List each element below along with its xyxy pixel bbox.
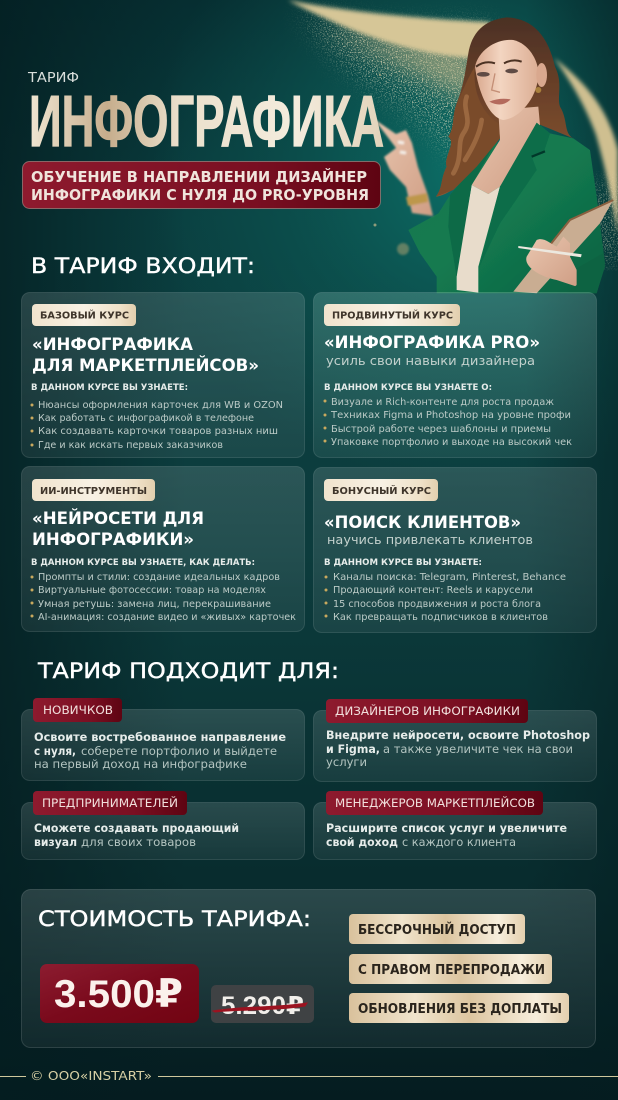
panel: basic course: Как работать с инфографикой в телефоне	[38, 413, 254, 424]
hair highlights	[453, 97, 482, 173]
left lapel	[448, 140, 497, 277]
chest	[472, 107, 540, 194]
panel: basic course: Как создавать карточки товаров разных ниш	[38, 426, 278, 437]
panel: designers: услуги	[326, 755, 367, 769]
panel: beginners: с нуля,	[34, 744, 76, 758]
panel: advanced course: усиль свои навыки дизайнера	[326, 353, 535, 368]
subtitle banner: ОБУЧЕНИЕ В НАПРАВЛЕНИИ ДИЗАЙНЕР	[31, 167, 367, 186]
panel: bonus course: научись привлекать клиентов	[327, 532, 533, 547]
panel: beginners: на первый доход на инфографике	[34, 757, 247, 771]
panel: basic course: БАЗОВЫЙ КУРС	[40, 308, 129, 322]
tariff label: ТАРИФ	[27, 70, 79, 86]
panel: AI tools: В ДАННОМ КУРСЕ ВЫ УЗНАЕТЕ, КАК ДЕЛАТЬ:	[31, 558, 255, 568]
panel: entrepreneurs: ПРЕДПРИНИМАТЕЛЕЙ	[42, 795, 178, 810]
heading: included: В ТАРИФ ВХОДИТ:	[31, 254, 255, 278]
current price: 3.500₽	[54, 973, 183, 1016]
tablet	[513, 200, 613, 293]
panel: advanced course: «ИНФОГРАФИКА PRO»	[324, 333, 540, 353]
hand	[526, 237, 578, 287]
blouse	[457, 185, 500, 293]
panel: marketplace managers: свой доход	[326, 835, 398, 849]
panel: marketplace managers: с каждого клиента	[402, 835, 516, 849]
panel: basic course: «ИНФОГРАФИКА	[32, 335, 194, 355]
panel: entrepreneurs: Сможете создавать продающий	[34, 821, 239, 835]
panel: bonus course: 15 способов продвижения и роста блога	[333, 599, 541, 610]
panel: advanced course: Быстрой работе через шаблоны и приемы	[331, 424, 551, 435]
feature: lifetime access: БЕССРОЧНЫЙ ДОСТУП	[358, 922, 516, 938]
panel: AI tools	[22, 466, 304, 632]
tablet edge	[550, 200, 613, 245]
woman portrait illustration	[408, 17, 613, 293]
panel: AI tools: ИНФОГРАФИКИ»	[32, 530, 194, 550]
panel: advanced course: Упаковке портфолио и выходе на высокий чек	[331, 437, 572, 448]
bracelet	[406, 193, 428, 206]
right lapel	[479, 123, 550, 267]
back hair	[436, 17, 573, 197]
panel: bonus course: Продающий контент: Reels и карусели	[333, 585, 533, 596]
panel: advanced course: ПРОДВИНУТЫЙ КУРС	[332, 308, 453, 322]
lapel notch	[532, 151, 545, 157]
ear	[536, 63, 547, 87]
footer: © ООО«INSTART»	[30, 1068, 152, 1083]
panel: bonus course: БОНУСНЫЙ КУРС	[332, 484, 431, 497]
panel: AI tools: AI-анимация: создание видео и «живых» карточек	[38, 612, 296, 623]
jacket	[408, 123, 605, 293]
main title: ИНФОГРАФИКА	[29, 82, 384, 162]
panel: designers: и Figma,	[326, 742, 380, 756]
panel: beginners: Освоите востребованное направление	[34, 730, 286, 744]
old price: 5.290₽	[221, 992, 304, 1020]
panel: marketplace managers: МЕНЕДЖЕРОВ МАРКЕТПЛЕЙСОВ	[335, 795, 535, 810]
panel: AI tools: Промпты и стили: создание идеальных кадров	[38, 572, 280, 583]
panel: advanced course	[314, 292, 596, 458]
raised left hand	[374, 119, 433, 216]
panel: designers: Внедрите нейросети, освоите Photoshop	[326, 728, 590, 742]
panel: beginners: соберете портфолио и выйдете	[81, 744, 277, 758]
panel: AI tools: Умная ретушь: замена лиц, перекрашивание	[38, 599, 271, 610]
panel: price	[22, 890, 596, 1048]
panel: marketplace managers: Расширите список услуг и увеличите	[326, 821, 567, 835]
old price	[211, 985, 314, 1023]
earring	[535, 87, 541, 93]
feature: resale right	[349, 954, 552, 984]
eyes and brows	[476, 60, 522, 92]
panel: marketplace managers	[314, 791, 596, 860]
panel: bonus course: «ПОИСК КЛИЕНТОВ»	[324, 513, 521, 533]
panel: entrepreneurs: визуал	[34, 835, 77, 849]
panel: entrepreneurs: для своих товаров	[81, 835, 196, 849]
front hair lock	[436, 67, 500, 197]
feature: free updates	[349, 993, 569, 1023]
face	[475, 40, 538, 120]
sleeve cuff	[567, 253, 605, 293]
feature: resale right: С ПРАВОМ ПЕРЕПРОДАЖИ	[358, 963, 545, 978]
panel: AI tools: «НЕЙРОСЕТИ ДЛЯ	[32, 507, 204, 529]
current price	[40, 964, 199, 1023]
feature: free updates: ОБНОВЛЕНИЯ БЕЗ ДОПЛАТЫ	[358, 1002, 562, 1017]
price heading: СТОИМОСТЬ ТАРИФА:	[38, 907, 311, 931]
subtitle banner	[22, 162, 380, 208]
panel: basic course: ДЛЯ МАРКЕТПЛЕЙСОВ»	[32, 354, 259, 376]
panel: basic course: В ДАННОМ КУРСЕ ВЫ УЗНАЕТЕ:	[31, 383, 188, 393]
lips	[489, 99, 511, 104]
panel: advanced course: Визуале и Rich-контенте для роста продаж	[331, 397, 554, 408]
panel: AI tools: ИИ-ИНСТРУМЕНТЫ	[40, 486, 147, 497]
panel: beginners: НОВИЧКОВ	[43, 703, 113, 717]
panel: basic course	[22, 292, 304, 458]
panel: bonus course: Каналы поиска: Telegram, Pinterest, Behance	[333, 572, 566, 583]
subtitle banner: ИНФОГРАФИКИ С НУЛЯ ДО PRO-УРОВНЯ	[31, 186, 369, 204]
panel: advanced course: Техниках Figma и Photoshop на уровне профи	[330, 410, 571, 421]
panel: designers	[314, 699, 596, 782]
nails	[398, 142, 406, 153]
panel: basic course: Где и как искать первых заказчиков	[38, 440, 223, 451]
panel: basic course: Нюансы оформления карточек для WB и OZON	[38, 400, 283, 411]
panel: bonus course: Как превращать подписчиков в клиентов	[333, 612, 548, 623]
panel: beginners	[22, 698, 304, 780]
heading: suitable for: ТАРИФ ПОДХОДИТ ДЛЯ:	[37, 659, 339, 683]
panel: bonus course: В ДАННОМ КУРСЕ ВЫ УЗНАЕТЕ:	[324, 558, 482, 568]
panel: entrepreneurs	[22, 791, 304, 860]
pen	[518, 246, 582, 257]
panel: advanced course: В ДАННОМ КУРСЕ ВЫ УЗНАЕТЕ О:	[324, 383, 492, 393]
feature: lifetime access	[349, 914, 525, 944]
panel: designers: ДИЗАЙНЕРОВ ИНФОГРАФИКИ	[335, 703, 520, 718]
panel: designers: а также увеличите чек на свои	[383, 742, 573, 756]
panel: AI tools: Виртуальные фотосессии: товар на моделях	[38, 585, 266, 596]
gold sand swoosh	[288, 0, 618, 262]
panel: bonus course	[314, 468, 596, 632]
